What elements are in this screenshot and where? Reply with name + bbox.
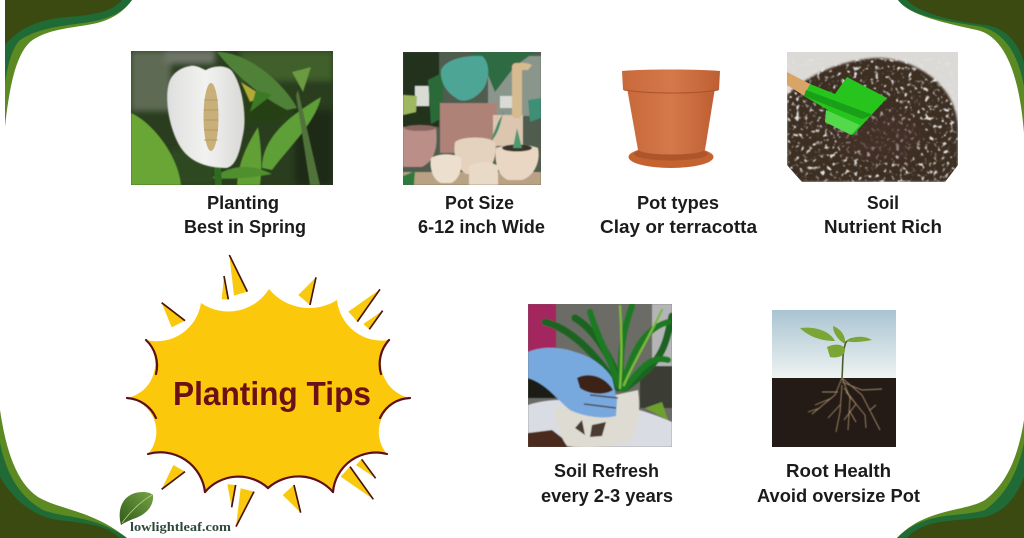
- pot: [555, 390, 639, 448]
- tall pot: [493, 115, 523, 146]
- panel: root health: [757, 310, 920, 506]
- glove: [528, 348, 617, 417]
- label: soil refresh: [541, 461, 673, 506]
- pink pot back: [440, 103, 497, 153]
- photo: soil and trowel: [787, 52, 958, 182]
- burst title: Planting Tips: [173, 375, 371, 412]
- label: soil refresh: Soil Refresh: [554, 461, 659, 481]
- photo: gloved hands repotting: [528, 304, 672, 448]
- label: pot types: Clay or terracotta: [600, 217, 758, 237]
- burst sparks: [162, 255, 383, 527]
- label: pot size: 6-12 inch Wide: [418, 217, 545, 237]
- pot: medium: [454, 138, 496, 174]
- icon: leaf: [120, 492, 153, 525]
- photo: terracotta pot: [622, 70, 720, 168]
- burst shaded edges: [127, 340, 410, 492]
- panel: soil refresh: [528, 304, 673, 506]
- corner decoration: bottom left: [0, 410, 127, 538]
- left pot: [403, 127, 437, 167]
- label: planting: Planting: [207, 193, 279, 213]
- label: planting: Best in Spring: [184, 217, 306, 237]
- corner decoration: top left: [5, 0, 132, 127]
- corner decoration: bottom right: [897, 420, 1024, 538]
- label: planting: [184, 193, 306, 237]
- photo: pots: [403, 52, 541, 185]
- panel: soil: [787, 52, 958, 237]
- pot: small left: [430, 154, 462, 183]
- panel: pot size: [403, 52, 545, 237]
- label: pot size: [418, 193, 545, 237]
- label: soil refresh: every 2-3 years: [541, 486, 673, 506]
- leaves: [545, 306, 672, 388]
- pot: small center: [469, 162, 498, 185]
- teal leaf: [441, 56, 488, 101]
- label: soil: Soil: [867, 193, 899, 213]
- label: soil: [824, 193, 942, 237]
- label: soil: Nutrient Rich: [824, 217, 942, 237]
- label: root health: [757, 461, 920, 506]
- label: root health: Root Health: [786, 461, 891, 481]
- photo: peace lily: [131, 50, 333, 185]
- burst shape: [127, 289, 410, 492]
- label: pot size: Pot Size: [445, 193, 514, 213]
- starburst: planting tips: [127, 255, 410, 527]
- logo text: lowlightleaf.com: [130, 519, 231, 534]
- label: pot types: Pot types: [637, 193, 719, 213]
- corner decoration: top right: [898, 0, 1024, 133]
- pot: right: [496, 145, 539, 180]
- photo: seedling with roots: [772, 310, 896, 447]
- panel: pot types: [600, 70, 758, 237]
- panel: planting: [131, 50, 333, 237]
- label: pot types: [600, 193, 758, 237]
- floor: [403, 172, 541, 185]
- label: root health: Avoid oversize Pot: [757, 486, 920, 506]
- logo: lowlightleaf: [120, 492, 231, 534]
